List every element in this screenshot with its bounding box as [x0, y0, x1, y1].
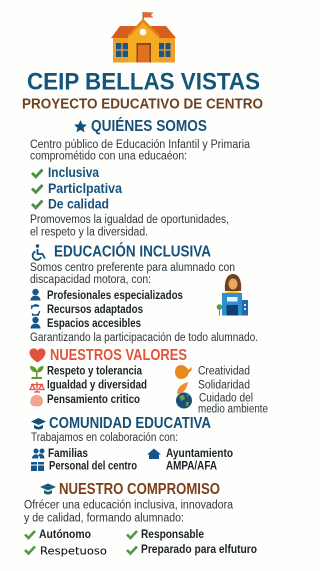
list: values right: Solidaridad [198, 380, 250, 392]
list: values right: Creatividad [198, 366, 250, 378]
list: values left: Respeto y tolerancia [47, 366, 143, 378]
text: intro: discapacidad motora, con: [30, 274, 151, 286]
text: closing [30, 214, 229, 238]
panel: educación inclusiva [30, 242, 258, 344]
list: partners [31, 448, 233, 473]
icon: graduation cap [31, 418, 46, 430]
icon: school building [111, 12, 176, 62]
list: checks: Inclusiva [48, 164, 99, 180]
icon: heart [30, 348, 46, 362]
list: checks [32, 164, 122, 212]
list: qualities: Autónomo [39, 529, 91, 541]
panel: quiénes somos [30, 116, 251, 238]
list: values right [175, 365, 268, 416]
list: resources: Espacios accesibles [47, 318, 141, 330]
list: partners: Familias [48, 448, 88, 460]
list: values left: Igualdad y diversidad [47, 380, 147, 392]
text: intro: Trabajamos en colaboración con: [31, 432, 178, 444]
text: closing: Promovemos la igualdad de oportunidades, [30, 214, 229, 226]
list: partners: Ayuntamiento [166, 448, 233, 460]
heading: educación inclusiva: EDUCACIÓN INCLUSIVA [54, 242, 211, 260]
list: values right: Cuidado del [199, 393, 253, 405]
heading: nuestros valores: NUESTROS VALORES [50, 347, 187, 364]
list: qualities: Preparado para elfuturo [141, 544, 257, 556]
text: description: Centro público de Educación Infantil y Primaria [30, 139, 251, 151]
list: resources: Recursos adaptados [47, 304, 143, 316]
list: checks: Particlpativa [48, 180, 122, 196]
list: resources [30, 289, 183, 330]
panel: nuestros valores [30, 347, 268, 416]
subtitle: PROYECTO EDUCATIVO DE CENTRO [22, 96, 263, 112]
text: intro [30, 262, 235, 286]
list: partners: Personal del centro [49, 461, 137, 473]
list: qualities: Responsable [141, 529, 204, 541]
list: values right: medio ambiente [198, 404, 268, 416]
icon: graduation cap [40, 484, 56, 494]
text: closing: el respeto y la diversidad. [30, 226, 148, 238]
text: intro: Ofrécer una educación inclusiva, innovadora [24, 500, 234, 512]
list: resources: Profesionales especializados [47, 290, 183, 302]
text: intro: Somos centro preferente para alumnado con [30, 262, 235, 274]
text: intro [24, 500, 234, 525]
text: description [30, 139, 251, 163]
text: intro: y de calidad, formando alumnado: [24, 513, 184, 525]
icon: teacher at building [217, 274, 248, 316]
title: CEIP BELLAS VISTAS [27, 68, 260, 96]
panel: comunidad educativa [31, 415, 233, 473]
list: qualities: Respetuoso [40, 546, 107, 558]
heading: comunidad educativa: COMUNIDAD EDUCATIVA [49, 415, 211, 432]
icon: star [74, 120, 87, 132]
list: qualities [25, 529, 257, 558]
heading: quiénes somos: QUIÉNES SOMOS [91, 116, 207, 135]
heading: nuestro compromiso: NUESTRO COMPROMISO [59, 481, 220, 498]
list: values left [30, 366, 147, 406]
panel: nuestro compromiso [24, 481, 257, 558]
icon: wheelchair [33, 244, 45, 260]
list: checks: De calidad [48, 196, 109, 212]
text: description: comprométido con una educaéon: [30, 151, 187, 163]
list: partners: AMPA/AFA [166, 461, 217, 473]
list: values left: Pensamiento critico [47, 394, 140, 406]
